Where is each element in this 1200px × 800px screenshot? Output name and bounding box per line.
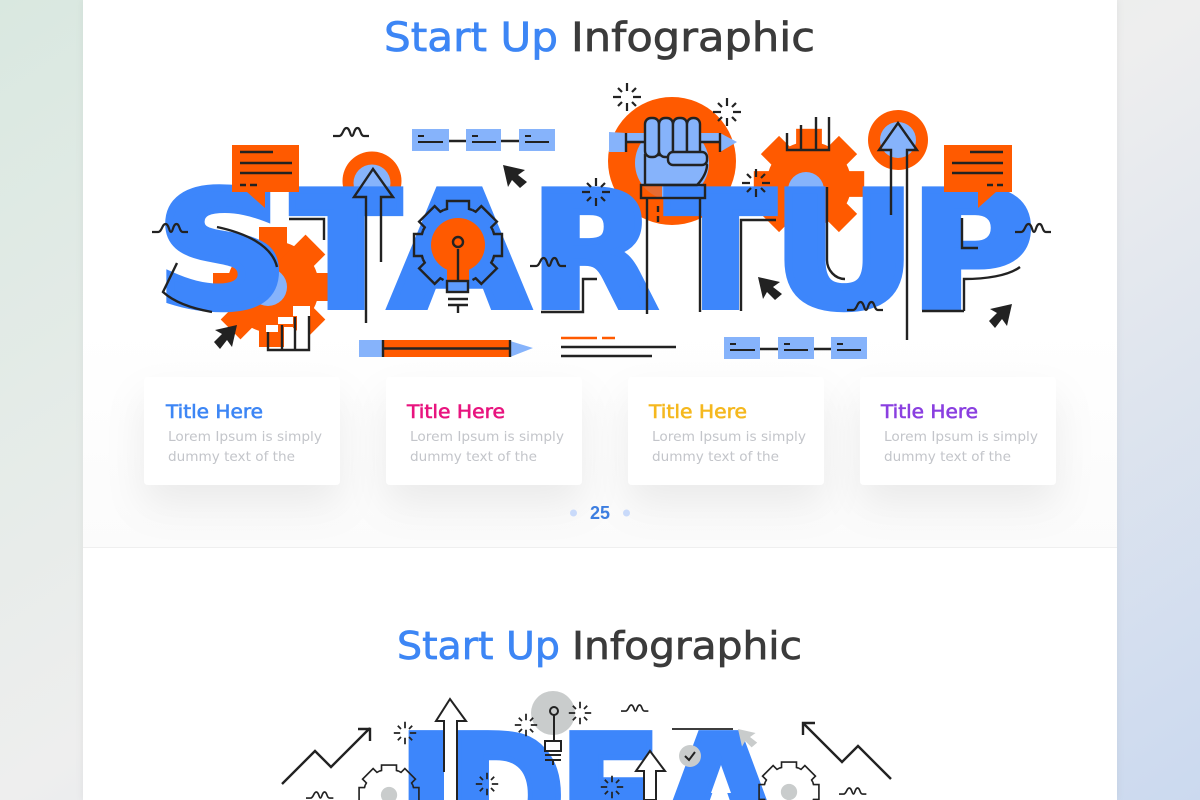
arrow up right <box>879 123 917 340</box>
title: slide 1: Infographic <box>571 15 815 61</box>
card 2: Title Here <box>406 401 505 423</box>
page number <box>570 503 630 523</box>
squiggles <box>152 128 1051 310</box>
check badge <box>679 745 701 767</box>
title: slide 1: Start Up <box>384 15 558 61</box>
bar chart on left gear <box>266 306 310 350</box>
gear with bulb <box>414 201 502 313</box>
divider between slides <box>83 547 1117 548</box>
line above A <box>672 728 733 730</box>
sparkles <box>394 702 623 798</box>
orange big circle with pale blob <box>608 97 736 225</box>
card 2: Lorem Ipsum is simply <box>410 429 564 445</box>
gear left gray <box>359 765 419 800</box>
word STARTUP: T <box>292 158 401 344</box>
word STARTUP: R <box>530 159 657 345</box>
bulb gray backdrop <box>531 691 575 735</box>
arrow up 1 outline <box>436 699 466 800</box>
cursors <box>214 165 1012 349</box>
flow boxes top <box>412 129 555 151</box>
line chart left <box>282 728 370 784</box>
card 1 <box>144 377 340 485</box>
card 1: Lorem Ipsum is simply <box>168 429 322 445</box>
sparkles <box>582 83 770 206</box>
illustration: STARTUP <box>152 83 1051 359</box>
title: slide 2: Infographic <box>572 624 802 668</box>
word STARTUP: S <box>156 158 289 345</box>
pencil <box>359 340 533 357</box>
arrow up 1 <box>444 730 447 800</box>
word STARTUP: T <box>666 158 775 344</box>
card 3 <box>628 377 824 485</box>
card 4: Title Here <box>880 401 978 423</box>
card 2 <box>386 377 582 485</box>
line chart right <box>803 723 891 779</box>
text lines under word <box>561 338 676 356</box>
arrow up left <box>354 169 393 323</box>
card 1: dummy text of the <box>168 449 295 465</box>
title: slide 2: Start Up <box>397 624 560 668</box>
page number: 25 <box>590 503 610 523</box>
flow boxes bottom <box>724 337 867 359</box>
card 4: dummy text of the <box>884 449 1011 465</box>
card 3: dummy text of the <box>652 449 779 465</box>
gear right gray <box>759 762 819 800</box>
card 3: Title Here <box>648 401 747 423</box>
card 1: Title Here <box>165 401 263 423</box>
card 4: Lorem Ipsum is simply <box>884 429 1038 445</box>
speech bubble right <box>944 145 1012 208</box>
arrow up 2 <box>636 751 665 800</box>
speech bubble left <box>232 145 299 208</box>
card 4 <box>860 377 1056 485</box>
letter outlines <box>163 187 1020 312</box>
gear left orange <box>213 227 333 347</box>
squiggles <box>306 705 866 798</box>
word STARTUP: U <box>772 158 916 344</box>
A counter <box>711 765 731 793</box>
illustration: IDEA <box>282 691 891 800</box>
orange circle with arrow backdrop <box>868 110 928 170</box>
word STARTUP: P <box>910 158 1034 344</box>
fist holding pencil <box>609 118 737 314</box>
gear right orange <box>754 129 864 239</box>
card 2: dummy text of the <box>410 449 537 465</box>
card 3: Lorem Ipsum is simply <box>652 429 806 445</box>
bulb line art <box>545 707 561 765</box>
word STARTUP <box>156 158 1034 345</box>
panel: slide 1 <box>83 0 1117 547</box>
word IDEA <box>408 730 767 800</box>
orange half circle behind T <box>342 152 402 210</box>
bar chart on right gear <box>787 117 829 150</box>
gray cursor <box>738 729 757 747</box>
word STARTUP: A <box>390 159 529 345</box>
